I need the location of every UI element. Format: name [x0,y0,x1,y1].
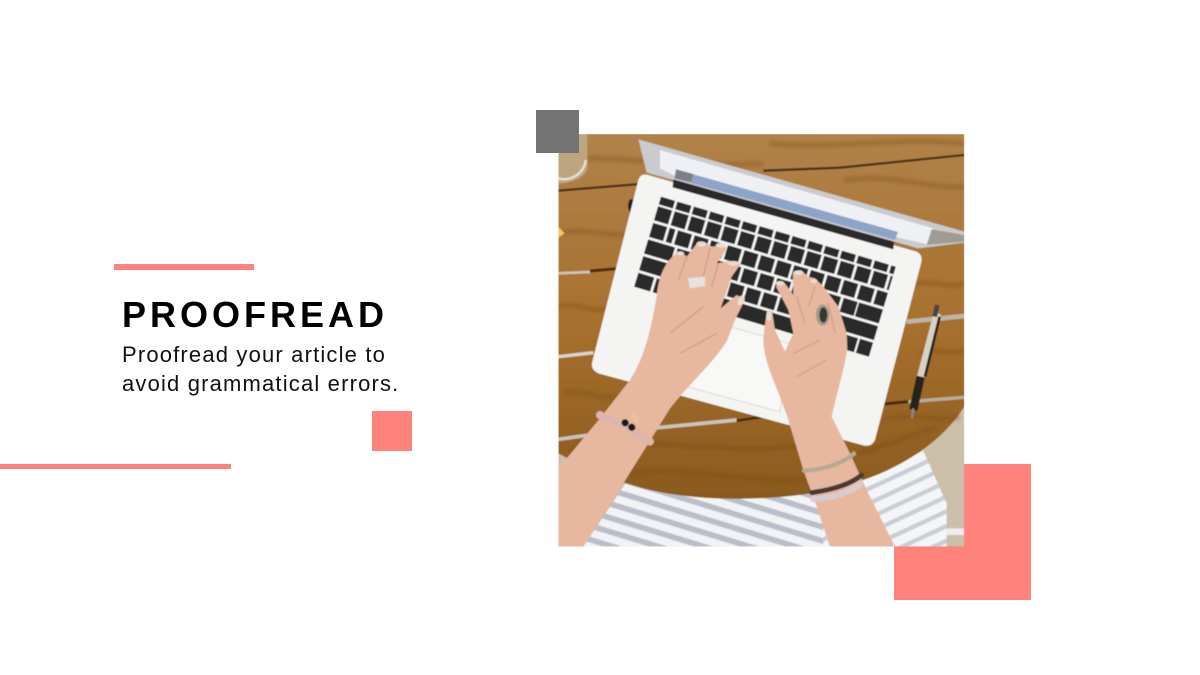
fingernails [676,241,817,321]
glass [558,134,587,183]
ground and shirt [558,407,964,547]
small accent square [372,411,412,451]
photo: hands typing on laptop [558,134,964,547]
body text: Proofread your article to [122,342,386,367]
right hand and arm [763,270,895,547]
pen [912,305,940,418]
heading: PROOFREAD [122,294,388,335]
bottom accent line [0,464,230,469]
rings [688,277,829,326]
keyboard [636,200,895,350]
body text [122,342,399,396]
bracelets [600,415,862,499]
small objects on table [558,227,565,238]
top accent line [114,264,254,270]
left hand and arm [558,242,745,547]
grey accent square [536,110,578,152]
large accent square [894,464,1031,600]
laptop base [592,174,922,446]
table [558,134,964,499]
laptop screen [638,139,964,248]
body text: avoid grammatical errors. [122,371,399,396]
